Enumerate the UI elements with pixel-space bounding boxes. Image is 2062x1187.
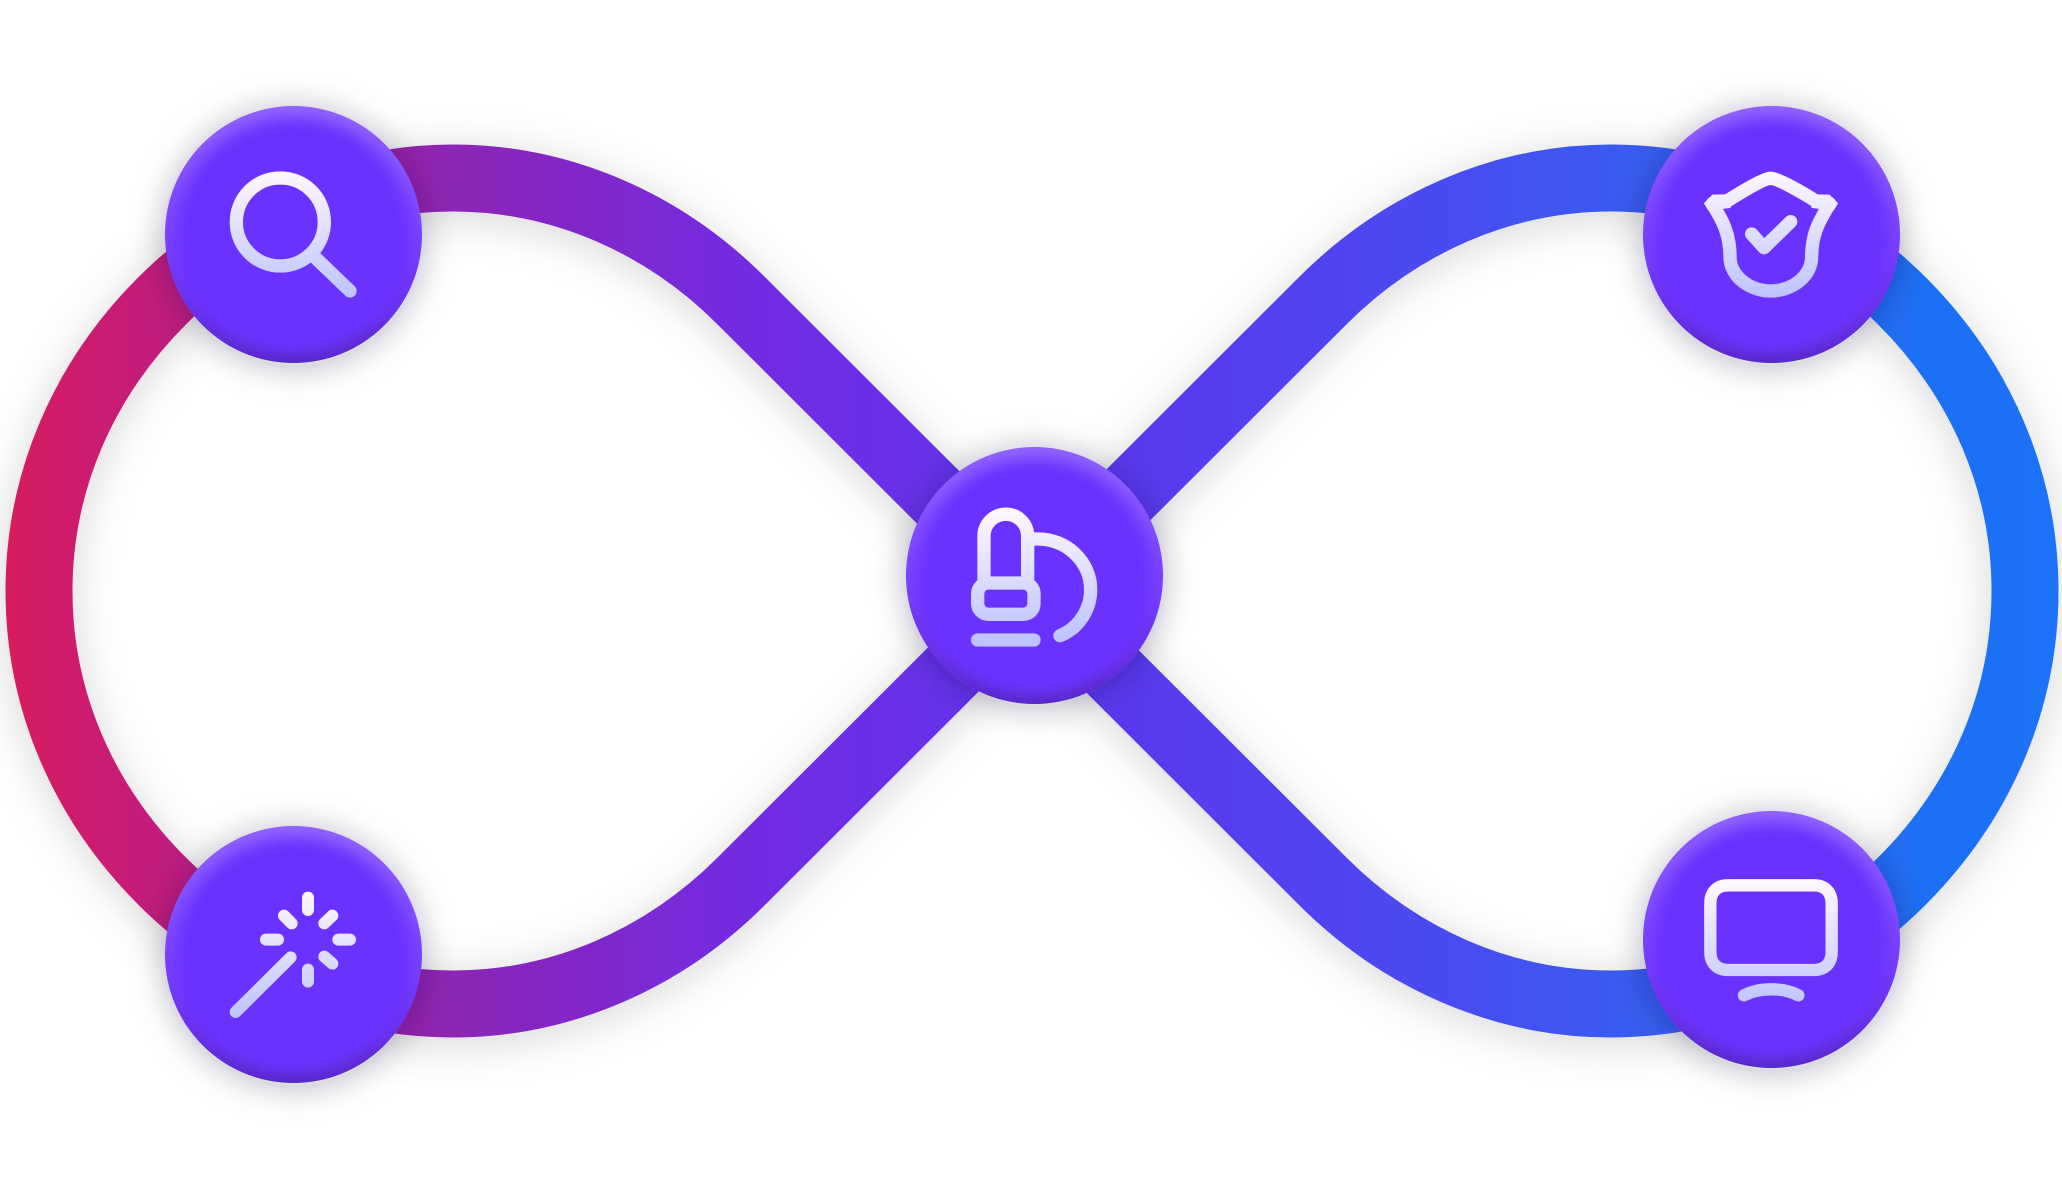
icon: shield with check <box>1705 178 1837 291</box>
icon: magnifying glass <box>236 178 350 291</box>
node: search <box>165 106 422 363</box>
icon: microscope <box>978 514 1091 640</box>
node: monitor <box>1643 811 1900 1068</box>
node: magic wand <box>165 826 422 1083</box>
node: shield <box>1643 106 1900 363</box>
icon: magic wand <box>236 898 350 1012</box>
node: microscope <box>906 447 1163 704</box>
icon: monitor <box>1710 885 1832 995</box>
infinity band <box>39 178 2025 1004</box>
